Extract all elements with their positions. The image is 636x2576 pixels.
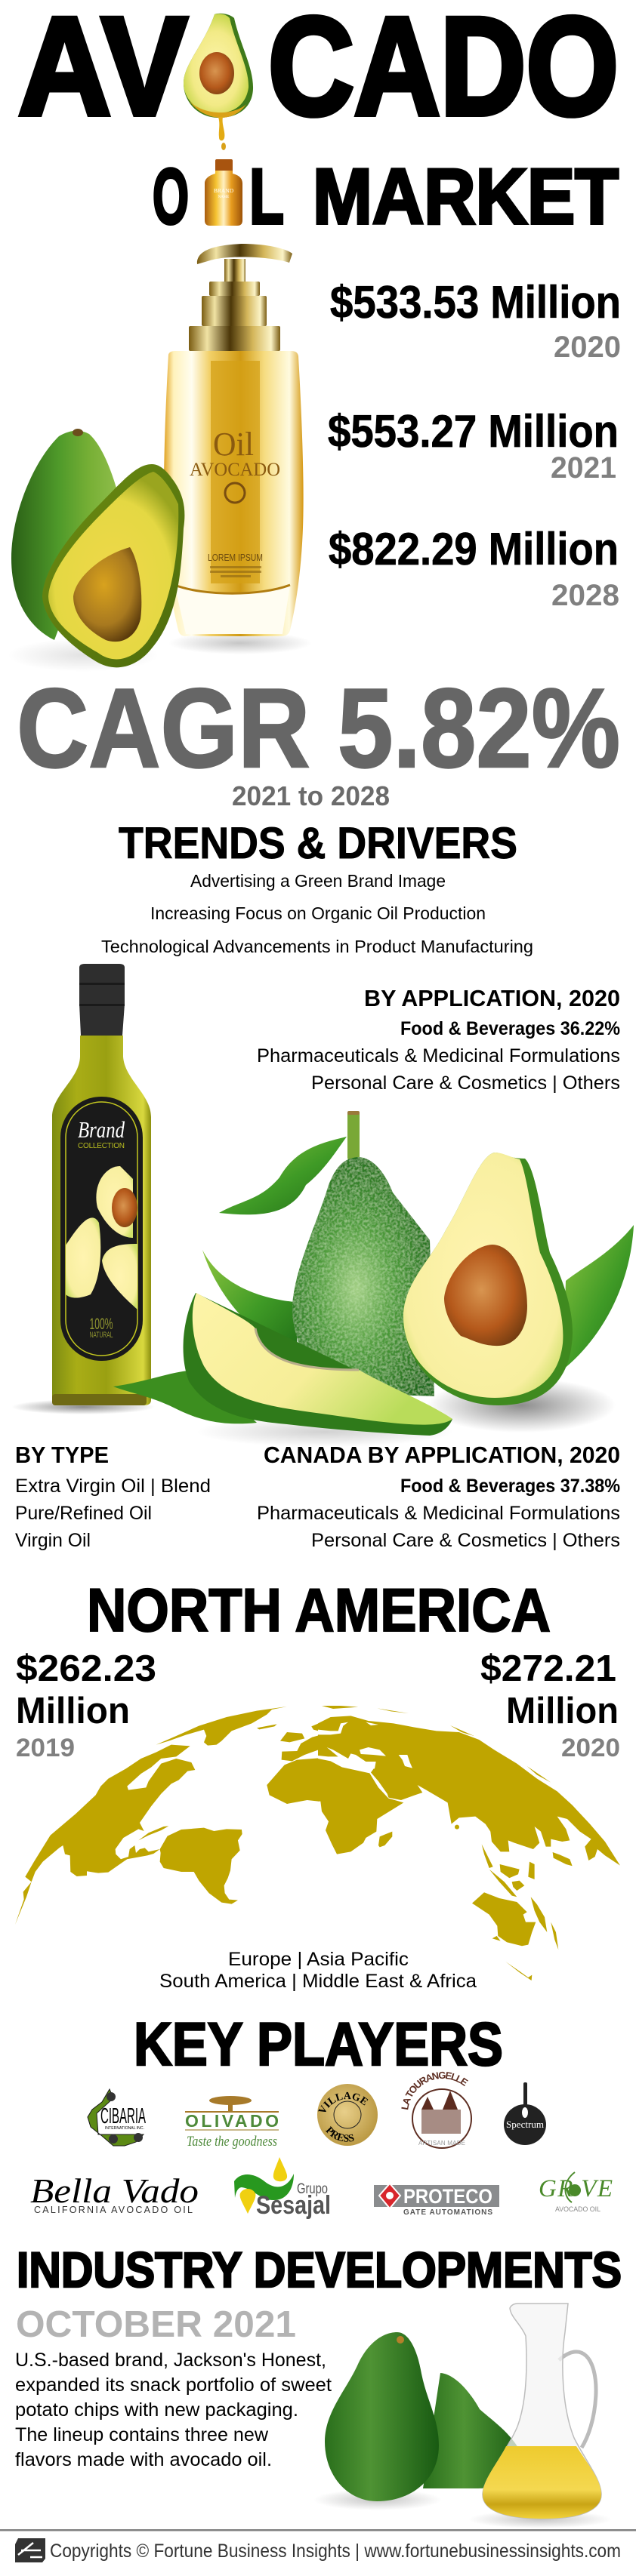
- heading: Key Players: KEY PLAYERS: [134, 2011, 503, 2079]
- panel: Canada by application 2020: CANADA BY APPLICATION, 2020: [264, 1442, 620, 1468]
- logo: Olivado: [185, 2096, 279, 2150]
- market size figures: [328, 277, 621, 612]
- stem: [347, 1111, 360, 1160]
- logo: La Tourangelle: ARTISAN MADE: [418, 2140, 465, 2147]
- illustration: olive oil bottle with label: Brand: [78, 1116, 125, 1143]
- logo: Grupo Sesajal: Sesajal: [256, 2191, 331, 2220]
- glass jug: [559, 2352, 596, 2448]
- illustration: olive oil bottle with label: COLLECTION: [78, 1142, 125, 1150]
- panel: Canada by application 2020: Food & Beverages 37.38%: [400, 1476, 620, 1497]
- list: trends and drivers: [101, 871, 533, 956]
- stat: 2021: 2021: [551, 451, 616, 485]
- stat: 2020: [330, 277, 621, 364]
- text block: development description: expanded its snack portfolio of sweet: [15, 2374, 332, 2396]
- footer: [0, 2529, 636, 2562]
- title words: OIL MARKET: [153, 153, 619, 241]
- title words: OIL MARKET: O: [153, 153, 189, 241]
- panel: Canada by application 2020: Pharmaceuticals & Medicinal Formulations: [257, 1503, 620, 1524]
- logos: key players: [30, 2071, 613, 2220]
- front avocado: [325, 2332, 439, 2501]
- logo: Olivado: Taste the goodness: [187, 2134, 277, 2150]
- panel: by application 2020: Food & Beverages 36.22%: [400, 1018, 620, 1039]
- illustration: olive oil bottle with label: NATURAL: [89, 1331, 113, 1340]
- stat: North America 2020: [480, 1648, 620, 1762]
- panel: by type: Extra Virgin Oil | Blend: [15, 1476, 211, 1497]
- logo: Grove: AVOCADO OIL: [555, 2205, 600, 2213]
- stat: North America 2020: Million: [506, 1691, 619, 1731]
- back avocado: [423, 2373, 525, 2488]
- whole pear avocado: [292, 1157, 434, 1396]
- title word: AVOCADO: [18, 0, 619, 145]
- list: other regions: [159, 1949, 477, 1992]
- logo: Village Press: PRESS: [325, 2125, 354, 2142]
- bottle label text: [190, 426, 280, 480]
- date: October 2021: OCTOBER 2021: [16, 2304, 296, 2345]
- illustration: olive oil bottle with label: 100%: [89, 1316, 113, 1333]
- heading: North America: NORTH AMERICA: [87, 1577, 551, 1645]
- icon: small amber oil bottle replacing I: NAME: [218, 195, 229, 199]
- logo: Bella Vado: Bella Vado: [30, 2171, 199, 2210]
- panel: by application 2020: Personal Care & Cosmetics | Others: [311, 1073, 620, 1094]
- map: world globe silhouette: [15, 1706, 620, 1980]
- stat: North America 2019: 2019: [16, 1734, 75, 1762]
- bottle label: [60, 1097, 143, 1361]
- bottle body: [164, 351, 304, 636]
- logo: Grupo Sesajal: [234, 2157, 331, 2220]
- text block: development description: flavors made with avocado oil.: [15, 2449, 272, 2470]
- panel: by application 2020: [257, 985, 620, 1094]
- halved avocado: [403, 1153, 573, 1405]
- stat: North America 2019: $262.23: [16, 1648, 156, 1689]
- panel: by type: Virgin Oil: [15, 1530, 91, 1551]
- icon: halved avocado with oil drip replacing O: [184, 14, 253, 150]
- text block: development description: U.S.-based brand, Jackson's Honest,: [15, 2350, 326, 2371]
- stat: North America 2020: $272.21: [480, 1648, 616, 1689]
- panel: by application 2020: Pharmaceuticals & Medicinal Formulations: [257, 1045, 620, 1066]
- icon: Fortune Business Insights logo: [15, 2538, 45, 2562]
- stat: North America 2020: 2020: [561, 1734, 620, 1762]
- logo: Proteco: GATE AUTOMATIONS: [403, 2208, 492, 2217]
- text block: development description: potato chips with new packaging.: [15, 2399, 298, 2421]
- list: trends and drivers: Increasing Focus on Organic Oil Production: [150, 903, 486, 923]
- logo: Proteco: PROTECO: [403, 2185, 492, 2208]
- pump head: [197, 244, 292, 264]
- logo: La Tourangelle: LA TOURANGELLE: [401, 2071, 468, 2110]
- bottle label text: Oil: [213, 426, 254, 463]
- panel: by type: Pure/Refined Oil: [15, 1503, 152, 1524]
- illustration: gold pump bottle labelled Oil Avocado: [164, 244, 312, 654]
- stat: North America 2019: Million: [16, 1691, 130, 1731]
- title: Avocado Oil Market: [18, 0, 619, 241]
- list: trends and drivers: Technological Advancements in Product Manufacturing: [101, 937, 533, 956]
- panel: by type: BY TYPE: [15, 1442, 109, 1468]
- avocado slice: [184, 1293, 452, 1436]
- text block: development description: [15, 2350, 332, 2470]
- CAGR headline: 2021 to 2028: [232, 780, 390, 811]
- heading: Trends & Drivers: TRENDS & DRIVERS: [119, 819, 517, 868]
- logo: Spectrum: [504, 2082, 546, 2145]
- stat: 2020: 2020: [554, 331, 621, 364]
- title words: OIL MARKET: L: [249, 153, 284, 241]
- text block: development description: The lineup contains three new: [15, 2424, 269, 2445]
- panel: Canada by application 2020: [257, 1442, 620, 1551]
- illustration: olive oil bottle with label: [11, 964, 155, 1414]
- logo: Proteco: [374, 2184, 499, 2217]
- panel: by application 2020: BY APPLICATION, 2020: [364, 985, 620, 1011]
- illustration: gold pump bottle labelled Oil Avocado: LOREM IPSUM: [208, 552, 263, 563]
- bottle label text: AVOCADO: [190, 460, 280, 480]
- panel: Canada by application 2020: Personal Care & Cosmetics | Others: [311, 1530, 620, 1551]
- logo: Grove: [539, 2172, 613, 2213]
- logo: Grove: GR VE: [539, 2175, 613, 2202]
- logo: Cibaria: INTERNATIONAL INC.: [105, 2126, 144, 2131]
- illustration: whole and halved avocado beside bottle: [8, 429, 184, 672]
- list: other regions: South America | Middle East & Africa: [159, 1971, 477, 1992]
- panel: by type: [15, 1442, 211, 1551]
- icon: small amber oil bottle replacing I: [205, 159, 242, 226]
- logo: Village Press: [317, 2084, 378, 2146]
- logo: Cibaria: [88, 2089, 146, 2146]
- illustration: avocados and leaves: [113, 1111, 634, 1447]
- logo: Spectrum: Spectrum: [506, 2119, 544, 2130]
- logo: La Tourangelle: [401, 2071, 472, 2149]
- bottle cap: [79, 964, 125, 1036]
- stat: 2028: 2028: [551, 579, 619, 612]
- list: trends and drivers: Advertising a Green Brand Image: [190, 871, 446, 891]
- logo: Village Press: VILLAGE: [318, 2092, 369, 2112]
- list: other regions: Europe | Asia Pacific: [228, 1949, 409, 1970]
- icon: small amber oil bottle replacing I: BRAND: [214, 187, 234, 194]
- logo: Bella Vado: CALIFORNIA AVOCADO OIL: [34, 2205, 193, 2215]
- leaves: [563, 1225, 634, 1370]
- logo: Olivado: OLIVADO: [185, 2111, 279, 2131]
- illustration: avocados and oil jug: [313, 2304, 612, 2528]
- stat: 2021: [328, 406, 619, 485]
- stat: 2028: [329, 524, 619, 612]
- logo: Cibaria: CIBARIA: [100, 2104, 146, 2128]
- stat: North America 2019: [16, 1648, 156, 1762]
- logo: Grupo Sesajal: Grupo: [297, 2181, 328, 2197]
